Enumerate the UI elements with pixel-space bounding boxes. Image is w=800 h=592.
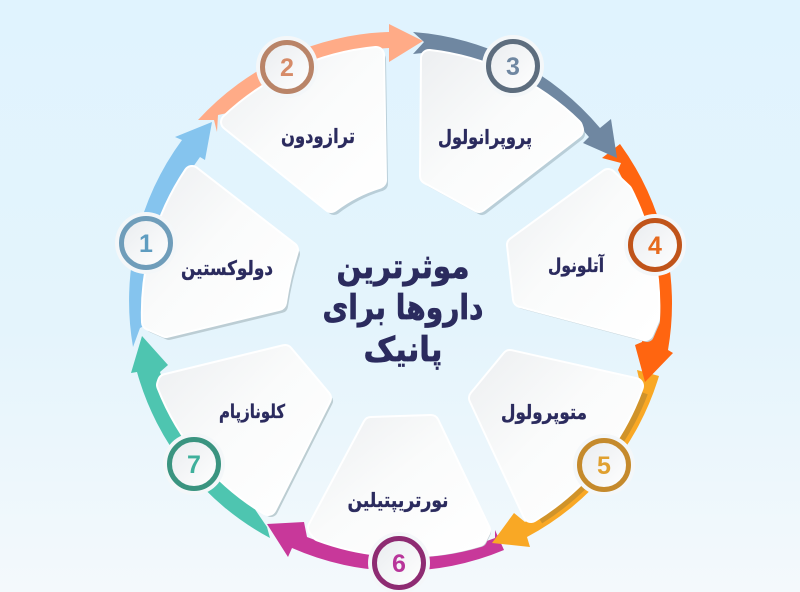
badge 1	[115, 212, 177, 274]
label 5: متوپرولول	[501, 400, 587, 425]
card 5	[477, 358, 635, 514]
center title: داروها برای	[322, 288, 484, 328]
badge 3	[482, 35, 544, 97]
badge 2: 2	[280, 54, 294, 82]
card 1	[150, 174, 293, 333]
badge 4: 4	[648, 232, 662, 260]
badge 3: 3	[506, 53, 520, 81]
label 6: نورتریپتیلین	[348, 488, 448, 513]
badge 6	[368, 532, 430, 592]
label 2: ترازودون	[281, 124, 355, 148]
center title: موثرترین	[336, 247, 470, 287]
arrow 1 blue	[129, 122, 212, 347]
card 7	[165, 353, 326, 510]
badge 5	[573, 434, 635, 496]
badge 7	[163, 433, 225, 495]
label 7: کلونازپام	[219, 401, 286, 423]
badge 4	[624, 214, 686, 276]
arrow 6 magenta	[267, 522, 504, 571]
card 2	[229, 55, 381, 208]
arrow 7 teal	[131, 336, 270, 538]
arrow 2 peach	[198, 24, 423, 132]
label 3: پروپرانولول	[438, 125, 532, 150]
label 1: دولوکستین	[181, 256, 273, 280]
badge 2	[256, 36, 318, 98]
badge 7: 7	[187, 451, 201, 479]
card 3	[428, 58, 578, 208]
ring of arrows	[129, 24, 673, 571]
badge 6: 6	[392, 550, 406, 578]
arrow 5 amber	[492, 370, 659, 547]
badge 1: 1	[139, 230, 153, 258]
center title	[322, 247, 484, 370]
card 4	[515, 177, 653, 335]
card 6	[316, 423, 484, 551]
arrow 3 slate	[413, 32, 617, 158]
arrow 4 orange	[602, 144, 673, 382]
center title: پانیک	[364, 330, 442, 370]
label 4: آتلونول	[548, 253, 604, 277]
badge 5: 5	[597, 452, 611, 480]
